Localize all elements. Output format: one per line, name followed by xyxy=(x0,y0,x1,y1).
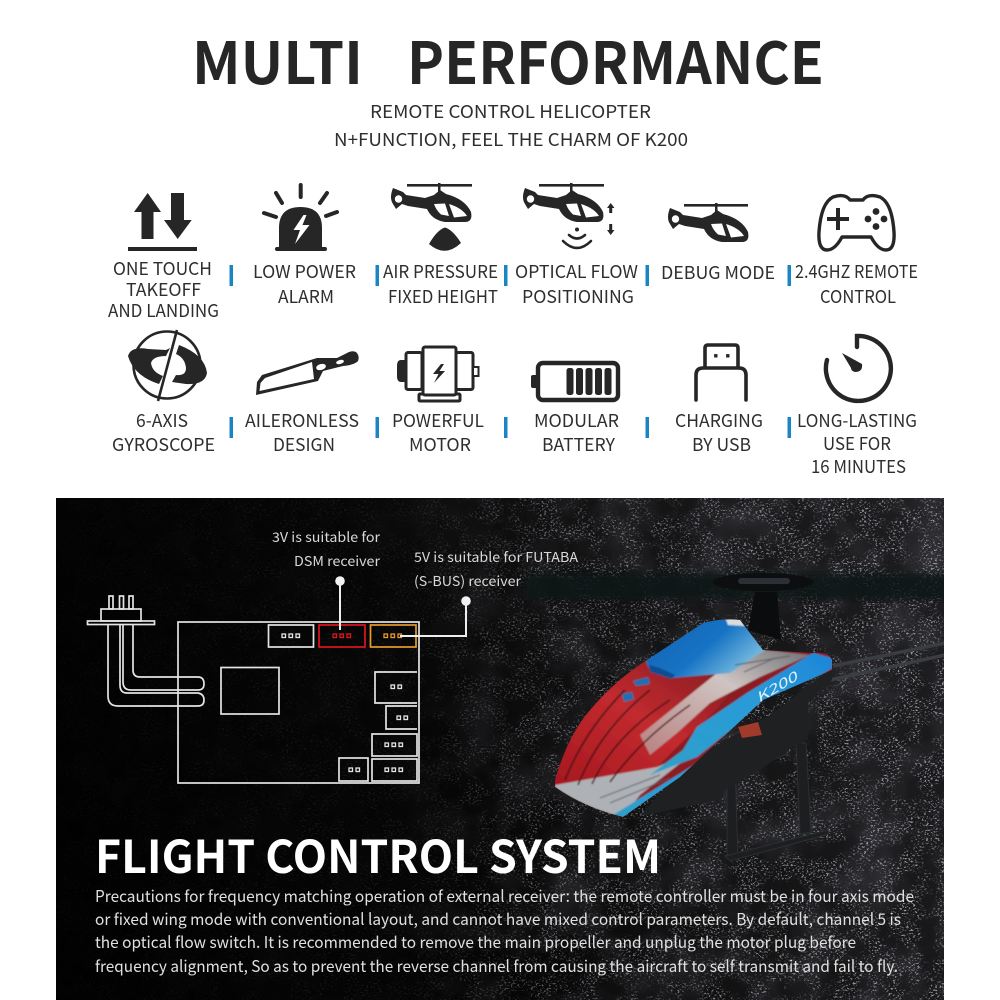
callout: 3V for DSM receiver: DSM receiver xyxy=(294,550,381,570)
label: 2.4ghz remote control xyxy=(795,258,918,309)
feature: modular battery xyxy=(531,363,619,457)
label: 2.4ghz remote control: 2.4GHZ REMOTE xyxy=(795,258,918,284)
landing gear xyxy=(725,743,829,861)
label: modular battery xyxy=(534,407,619,457)
subtitle: REMOTE CONTROL HELICOPTER xyxy=(370,98,651,124)
icon: usb plug xyxy=(696,345,746,400)
label: optical flow positioning: POSITIONING xyxy=(522,283,634,309)
label: aileronless design: AILERONLESS xyxy=(245,407,359,433)
icon: helicopter xyxy=(668,203,748,242)
label: aileronless design xyxy=(245,407,359,457)
icon: helicopter with pressure fan xyxy=(391,183,472,251)
label: 6-axis gyroscope xyxy=(112,407,215,457)
subtitle: N+FUNCTION, FEEL THE CHARM OF K200 xyxy=(334,126,688,152)
label: 6-axis gyroscope: 6-AXIS xyxy=(136,407,188,433)
feature: one touch takeoff and landing xyxy=(108,193,219,323)
icon: battery xyxy=(531,363,618,400)
label: aileronless design: DESIGN xyxy=(273,431,335,457)
title: MULTI xyxy=(192,17,363,101)
label: one touch takeoff and landing xyxy=(108,255,219,323)
processor block xyxy=(221,668,279,714)
panel: flight control system xyxy=(56,498,955,1000)
feature: air pressure fixed height xyxy=(383,183,498,309)
icon: helicopter with optical sensor xyxy=(523,183,614,248)
body text: the optical flow switch. It is recommended to remove the main propeller and unplug the motor plug before xyxy=(95,929,856,953)
icon: timer xyxy=(826,336,891,401)
label: 2.4ghz remote control: CONTROL xyxy=(820,283,896,309)
label: powerful motor: MOTOR xyxy=(409,431,471,457)
label: modular battery: MODULAR xyxy=(534,407,619,433)
label: debug mode: DEBUG MODE xyxy=(661,259,775,285)
circuit board diagram xyxy=(88,596,419,783)
feature: low power alarm xyxy=(253,185,356,309)
label: one touch takeoff and landing: TAKEOFF xyxy=(126,276,201,302)
label: charging by usb: CHARGING xyxy=(675,407,763,433)
icon: rotor blade xyxy=(256,351,359,395)
body text xyxy=(95,883,914,977)
callout: 5V for FUTABA receiver: 5V is suitable for FUTABA xyxy=(414,546,579,566)
label: long-lasting use for 16 minutes: USE FOR xyxy=(823,430,891,456)
title: PERFORMANCE xyxy=(407,17,824,101)
orange connector: 5V xyxy=(370,625,416,647)
icon: gyroscope xyxy=(128,330,207,401)
heading: flight control system: FLIGHT CONTROL SYSTEM xyxy=(95,821,661,886)
feature: debug mode xyxy=(661,203,775,285)
label: one touch takeoff and landing: AND LANDING xyxy=(108,297,219,323)
label: charging by usb: BY USB xyxy=(692,431,751,457)
callout: 5V for FUTABA receiver: (S-BUS) receiver xyxy=(414,570,522,590)
main rotor blur xyxy=(525,573,955,600)
helicopter photo xyxy=(525,573,955,861)
feature: optical flow positioning xyxy=(515,183,638,309)
K200 logo: K200 xyxy=(751,665,803,706)
callout: 5V for FUTABA receiver xyxy=(400,546,579,636)
label: powerful motor xyxy=(392,407,484,457)
label: low power alarm: LOW POWER xyxy=(253,258,356,284)
feature: long-lasting use for 16 minutes xyxy=(797,336,917,479)
label: one touch takeoff and landing: ONE TOUCH xyxy=(113,255,212,281)
body text: frequency alignment, So as to prevent the reverse channel from causing the aircraft to self transmit and fail to fly. xyxy=(95,953,898,977)
right side connectors xyxy=(339,672,417,781)
antenna connector and wires xyxy=(88,596,204,706)
body text: or fixed wing mode with conventional layout, and cannot have mixed control parameters. By default, channel 5 is xyxy=(95,906,901,930)
feature: powerful motor xyxy=(392,347,484,457)
subtitle xyxy=(334,98,688,152)
callout: 3V for DSM receiver: 3V is suitable for xyxy=(272,526,381,546)
feature: aileronless design xyxy=(245,351,359,457)
icon: alarm beacon xyxy=(264,185,337,251)
white connector xyxy=(268,625,314,647)
tail booms xyxy=(830,643,945,680)
body text: Precautions for frequency matching operation of external receiver: the remote controller must be in four axis mode xyxy=(95,883,914,907)
canopy xyxy=(550,615,840,820)
label: 6-axis gyroscope: GYROSCOPE xyxy=(112,431,215,457)
label: optical flow positioning xyxy=(515,258,638,309)
board outline xyxy=(178,622,419,783)
rotor mast xyxy=(748,592,781,640)
label: long-lasting use for 16 minutes: 16 MINUTES xyxy=(811,453,906,479)
icon: gamepad xyxy=(819,196,894,250)
icon: motor xyxy=(397,347,478,401)
callout: 3V for DSM receiver xyxy=(272,526,381,630)
motor wires xyxy=(738,722,762,738)
label: low power alarm: ALARM xyxy=(278,283,334,309)
label: air pressure fixed height: AIR PRESSURE xyxy=(383,258,498,284)
label: modular battery: BATTERY xyxy=(542,431,615,457)
label: long-lasting use for 16 minutes: LONG-LASTING xyxy=(797,407,917,433)
label: long-lasting use for 16 minutes xyxy=(797,407,917,479)
feature: 6-axis gyroscope xyxy=(112,330,215,457)
feature: 2.4ghz remote control xyxy=(795,196,918,309)
panel background: dark textured surface xyxy=(56,498,944,1000)
label: powerful motor: POWERFUL xyxy=(392,407,484,433)
fuselage xyxy=(640,668,832,816)
label: optical flow positioning: OPTICAL FLOW xyxy=(515,258,638,284)
label: charging by usb xyxy=(675,407,763,457)
label: low power alarm xyxy=(253,258,356,309)
red connector: 3V xyxy=(319,625,365,647)
label: air pressure fixed height: FIXED HEIGHT xyxy=(388,283,498,309)
label: air pressure fixed height xyxy=(383,258,498,309)
icon: up and down arrows xyxy=(128,193,197,251)
title xyxy=(192,17,824,101)
feature: charging by usb xyxy=(675,345,763,457)
